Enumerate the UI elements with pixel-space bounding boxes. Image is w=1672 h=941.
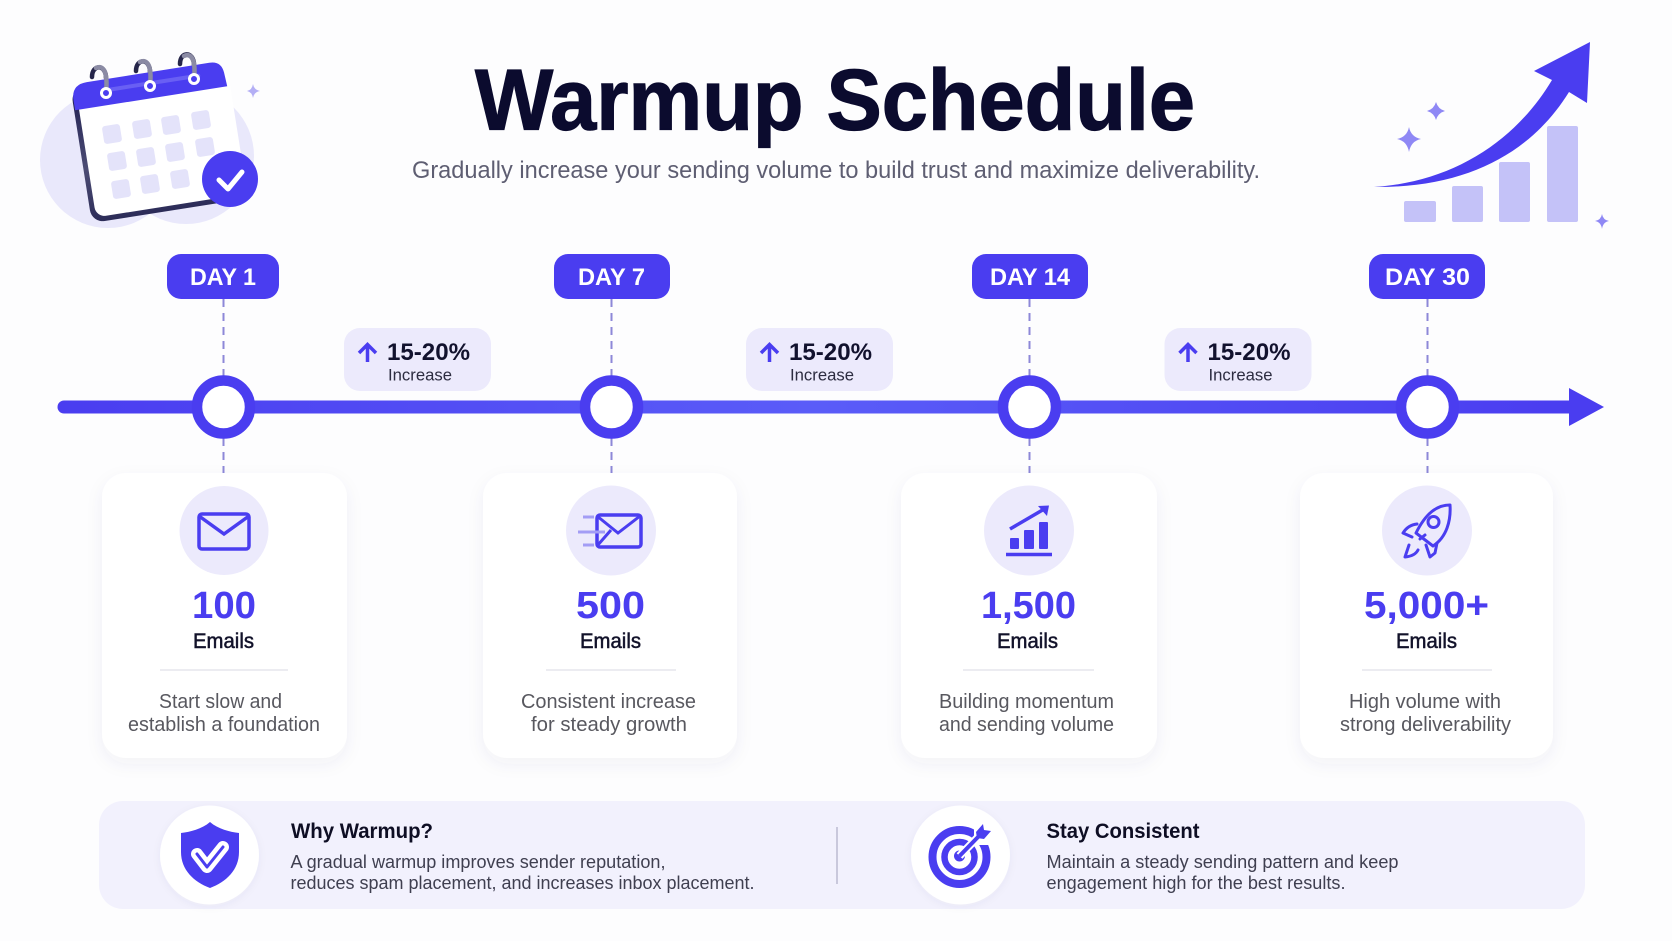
- badge: day 1: [167, 254, 279, 299]
- text: why warmup: [290, 820, 754, 893]
- icon: rocket: [1382, 486, 1472, 576]
- text: stay consistent: [1046, 820, 1398, 893]
- unit label: Emails: [580, 630, 641, 653]
- badge: day 14: [972, 254, 1088, 299]
- email count: 500: [576, 585, 645, 627]
- timeline node: day 1: [197, 380, 250, 434]
- text: why warmup: A gradual warmup improves sender reputation,: [290, 852, 666, 872]
- description: Building momentum: [939, 691, 1114, 713]
- callout: 15-20% increase (day 1 to 7): 15-20%: [387, 339, 470, 366]
- callout: 15-20% increase (day 14 to 30): 15-20%: [1208, 339, 1290, 366]
- description: strong deliverability: [1340, 714, 1511, 736]
- description: Start slow and: [159, 691, 282, 713]
- timeline node: day 14: [1003, 380, 1056, 434]
- badge: day 30: [1369, 254, 1485, 299]
- unit label: Emails: [1396, 630, 1457, 653]
- callout: 15-20% increase (day 7 to 14): [746, 328, 893, 391]
- callout: 15-20% increase (day 14 to 30): [1164, 328, 1312, 391]
- description: [939, 691, 1114, 736]
- badge: day 14: DAY 14: [990, 264, 1071, 291]
- description: Consistent increase: [521, 691, 696, 713]
- description: establish a foundation: [128, 714, 320, 736]
- icon: bar chart with arrow: [984, 486, 1074, 576]
- badge: day 1: DAY 1: [190, 264, 256, 291]
- panel: day 1 card: [102, 473, 347, 758]
- callout: 15-20% increase (day 14 to 30): Increase: [1208, 366, 1272, 384]
- description: and sending volume: [939, 714, 1114, 736]
- timeline node: day 7: [585, 380, 638, 434]
- email count: 5,000+: [1364, 585, 1489, 627]
- callout: 15-20% increase (day 7 to 14): 15-20%: [789, 339, 872, 366]
- panel: bottom info bar: [99, 801, 1585, 909]
- title: Warmup Schedule: [475, 52, 1195, 148]
- panel: day 30 card: [1300, 473, 1553, 758]
- icon: growth chart with arrow: [1374, 42, 1609, 229]
- badge: day 30: DAY 30: [1385, 264, 1470, 291]
- callout: 15-20% increase (day 1 to 7): Increase: [388, 366, 452, 384]
- icon: fast envelope: [566, 486, 656, 576]
- email count: 100: [192, 585, 256, 627]
- text: why warmup: reduces spam placement, and increases inbox placement.: [290, 873, 754, 893]
- email count: 1,500: [981, 585, 1076, 627]
- timeline axis with arrow: [58, 388, 1604, 426]
- description: High volume with: [1349, 691, 1501, 713]
- badge: day 7: [554, 254, 670, 299]
- text: stay consistent: engagement high for the best results.: [1046, 873, 1346, 893]
- callout: 15-20% increase (day 7 to 14): Increase: [790, 366, 854, 384]
- icon: shield with check: [160, 806, 259, 904]
- timeline node: day 30: [1401, 380, 1454, 434]
- icon: calendar illustration: [40, 54, 260, 228]
- unit label: Emails: [997, 630, 1058, 653]
- connector: dashed day lines: [224, 299, 1428, 473]
- panel: day 14 card: [901, 473, 1157, 758]
- callout: 15-20% increase (day 1 to 7): [344, 328, 491, 391]
- description: [521, 691, 696, 736]
- description: [128, 691, 320, 736]
- badge: day 7: DAY 7: [578, 264, 645, 291]
- icon: target with arrow: [911, 806, 1010, 904]
- subtitle: Gradually increase your sending volume to build trust and maximize deliverability.: [412, 157, 1260, 184]
- text: stay consistent: Maintain a steady sending pattern and keep: [1046, 852, 1398, 872]
- text: stay consistent: Stay Consistent: [1046, 820, 1200, 843]
- description: for steady growth: [531, 714, 687, 736]
- panel: day 7 card: [483, 473, 737, 758]
- unit label: Emails: [193, 630, 254, 653]
- icon: envelope: [180, 486, 268, 575]
- text: why warmup: Why Warmup?: [291, 820, 433, 843]
- description: [1340, 691, 1511, 736]
